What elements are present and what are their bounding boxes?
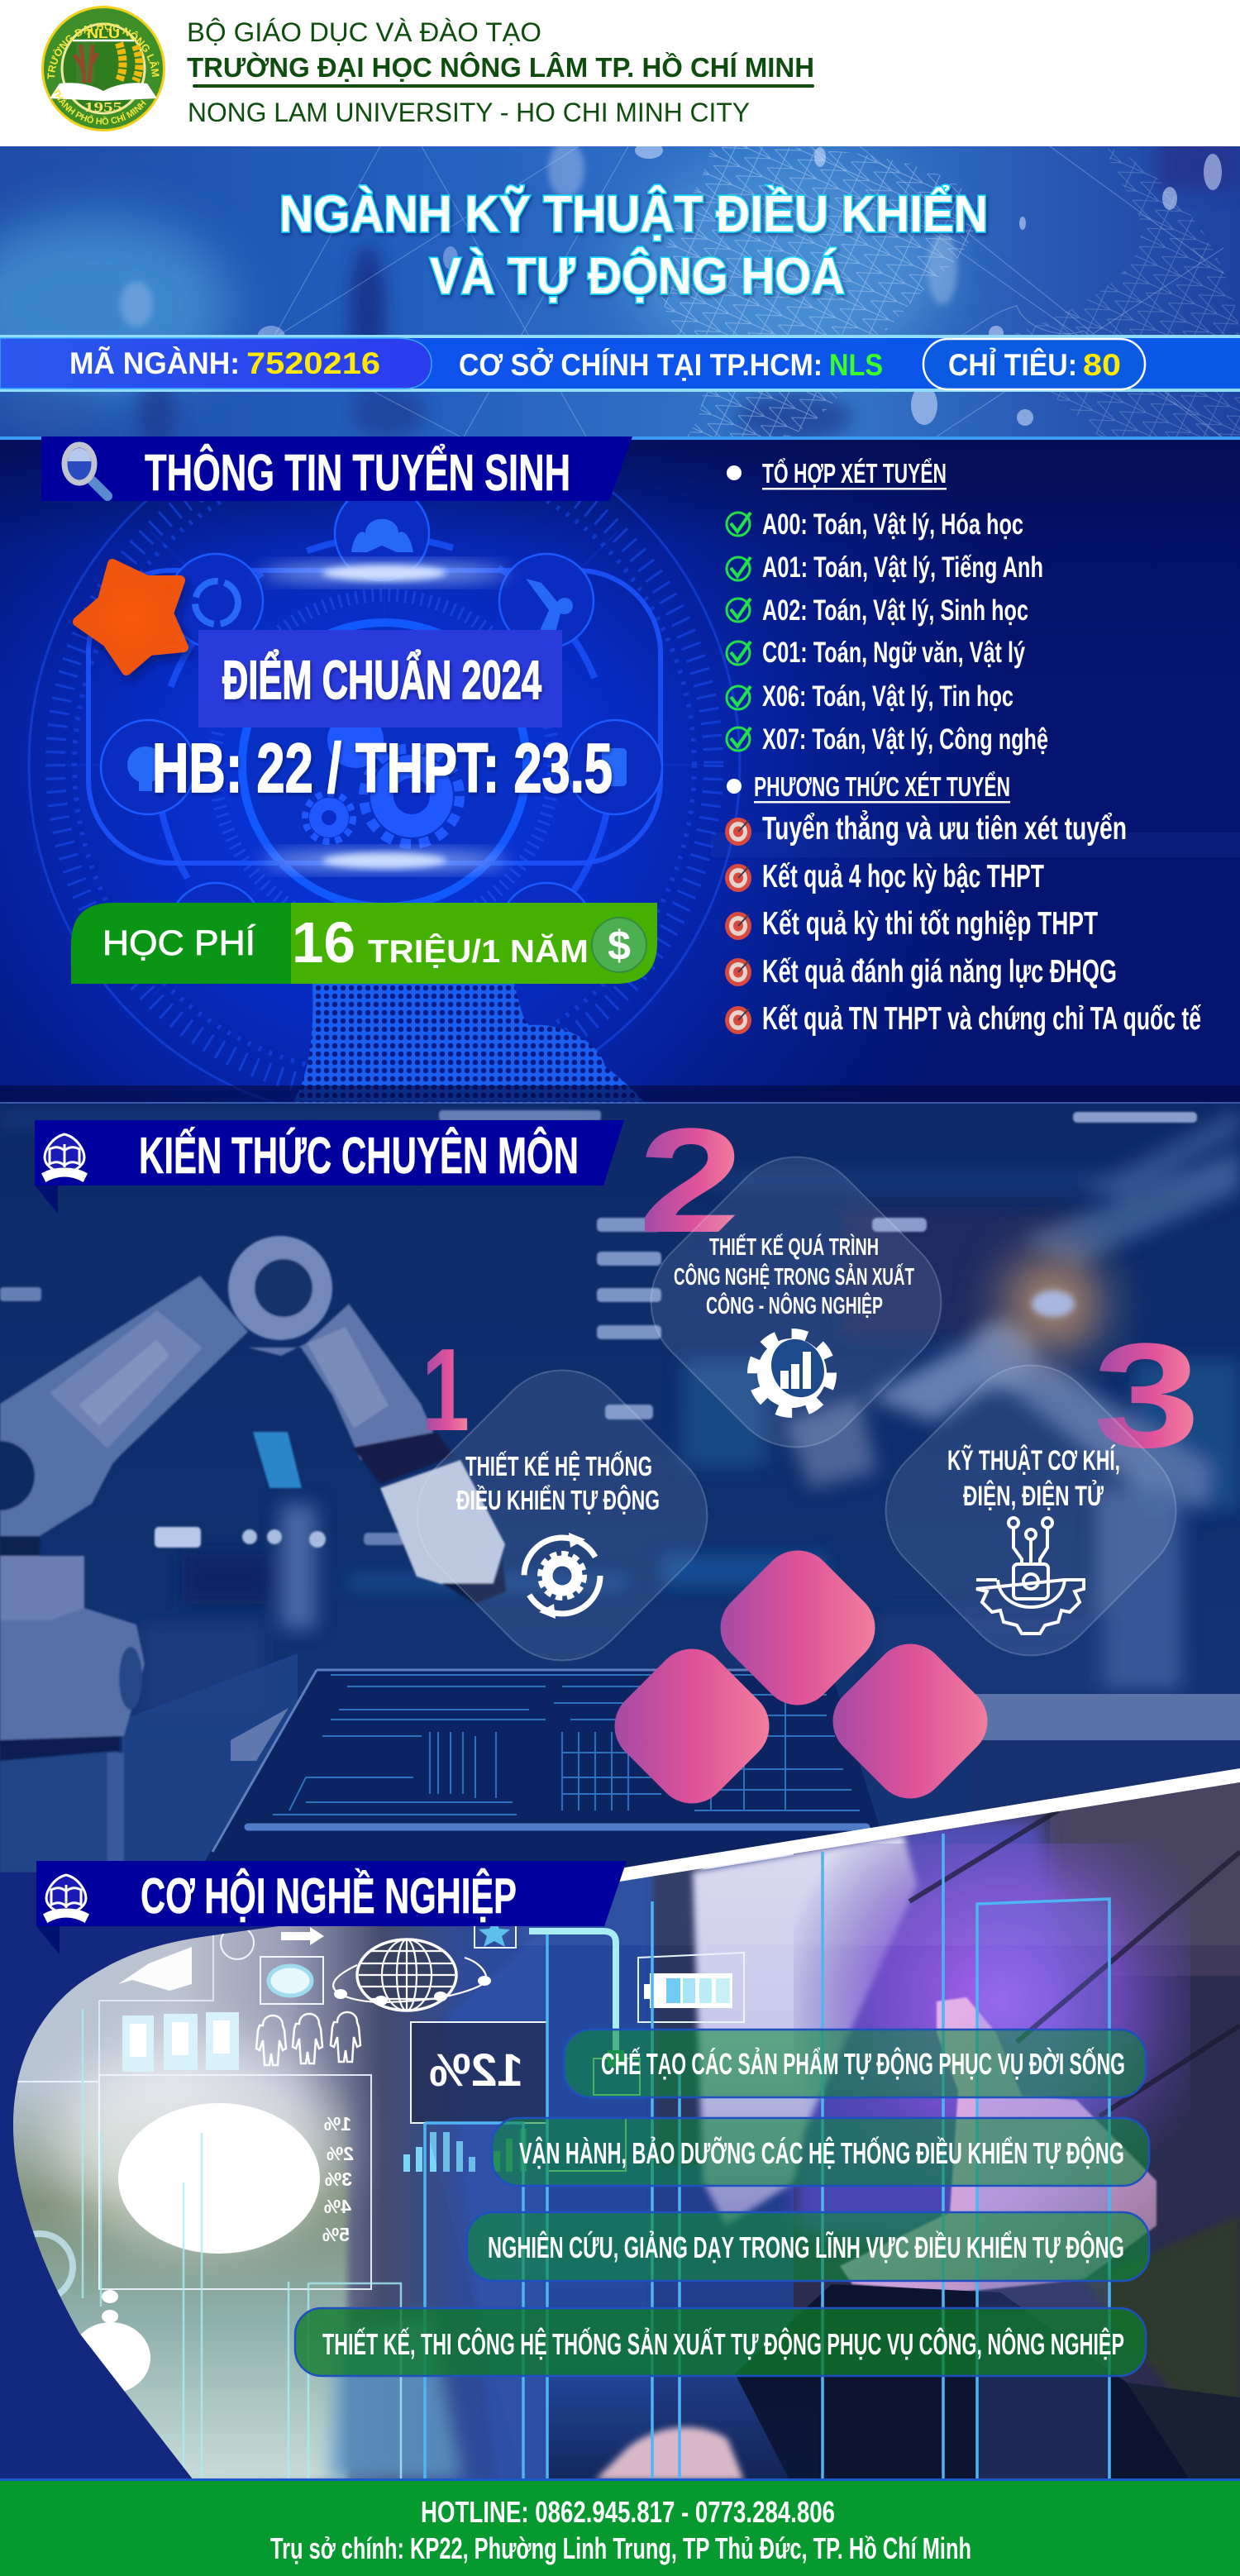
icon: open book crest [45, 1875, 88, 1921]
title [279, 186, 988, 305]
item X06: X06: Toán, Vật lý, Tin học [762, 680, 1013, 713]
bars [403, 2129, 527, 2172]
address: Trụ sở chính: KP22, Phường Linh Trung, TP Thủ Đức, TP. Hồ Chí Minh [270, 2531, 971, 2565]
panel background with tech HUD [0, 409, 1240, 1120]
card: knowledge 2 [622, 1128, 971, 1476]
heading: knowledge: KIẾN THỨC CHUYÊN MÔN [139, 1128, 579, 1185]
method 2: Kết quả 4 học kỳ bậc THPT [762, 859, 1044, 894]
item A02 [727, 594, 1028, 627]
icon: gear cycle [524, 1533, 600, 1619]
header bar [41, 6, 814, 131]
heading: careers [36, 1861, 627, 1954]
icon: globe [333, 1939, 491, 2011]
factory photo background [0, 1104, 1240, 1872]
robot arm [0, 1236, 506, 1872]
university name: TRƯỜNG ĐẠI HỌC NÔNG LÂM TP. HỒ CHÍ MINH [187, 51, 814, 83]
card: knowledge 3: ĐIỆN, ĐIỆN TỬ [963, 1481, 1104, 1512]
card: knowledge 2: CÔNG - NÔNG NGHIỆP [706, 1291, 883, 1319]
major code pill: MÃ NGÀNH: [69, 346, 240, 380]
item C01: C01: Toán, Ngữ văn, Vật lý [762, 637, 1025, 669]
pointing hand [840, 1997, 1157, 2292]
navy backdrop [0, 1777, 1240, 2480]
icon: open book crest [43, 1134, 86, 1181]
icon: star [479, 1920, 510, 1947]
subject combinations list [727, 458, 1048, 756]
panel: admissions info [0, 409, 1240, 1120]
number 1: 1 [422, 1324, 470, 1456]
heading: careers: CƠ HỘI NGHỀ NGHIỆP [141, 1868, 517, 1924]
monitor with circuit traces [198, 1670, 894, 1872]
icon: university logo: TRƯỜNG ĐẠI HỌC NÔNG LÂM [47, 22, 160, 79]
pink diamond left [599, 1634, 785, 1819]
icon: wireframe hand [292, 984, 646, 1104]
career item 3 [467, 2212, 1149, 2281]
heading: knowledge [35, 1120, 624, 1214]
cutoff score box: ĐIỂM CHUẨN 2024 [222, 649, 541, 710]
title: NGÀNH KỸ THUẬT ĐIỀU KHIỂN [279, 186, 988, 243]
card: knowledge 2: THIẾT KẾ QUÁ TRÌNH [709, 1233, 879, 1261]
item A00: A00: Toán, Vật lý, Hóa học [762, 508, 1023, 541]
item X07: X07: Toán, Vật lý, Công nghệ [762, 723, 1048, 756]
campus: CƠ SỞ CHÍNH TẠI TP.HCM: [459, 347, 823, 382]
business photo with HUD [0, 1777, 1240, 2480]
heading: admissions: THÔNG TIN TUYỂN SINH [145, 445, 570, 502]
card: knowledge 3: KỸ THUẬT CƠ KHÍ, [947, 1445, 1120, 1476]
career item 4 [295, 2308, 1146, 2376]
item C01 [727, 637, 1025, 669]
white diagonal slash [579, 1768, 1240, 1888]
career item 1 [564, 2030, 1146, 2097]
admission methods list [725, 771, 1201, 1037]
method 4 [725, 954, 1117, 990]
floor and table [122, 1653, 1240, 1872]
quota pill: CHỈ TIÊU: [948, 347, 1077, 382]
major code pill: 7520216 [246, 346, 380, 380]
panel: professional knowledge [0, 1098, 1240, 1872]
pink diamond right [818, 1629, 1003, 1814]
glow and white shapes [58, 2042, 339, 2240]
mirrored percent labels: 4% [324, 2196, 351, 2217]
number 3: 3 [1093, 1313, 1200, 1479]
icon: orange star [78, 564, 184, 670]
icon: dollar coin: $ [608, 923, 631, 969]
english name: NONG LAM UNIVERSITY - HO CHI MINH CITY [188, 98, 750, 127]
ministry name: BỘ GIÁO DỤC VÀ ĐÀO TẠO [187, 17, 541, 47]
method 3: Kết quả kỳ thi tốt nghiệp THPT [762, 906, 1098, 942]
card: knowledge 1: ĐIỀU KHIỂN TỰ ĐỘNG [456, 1484, 660, 1515]
title: VÀ TỰ ĐỘNG HOÁ [430, 248, 845, 305]
tuition pill [71, 903, 657, 984]
icon: university logo: 1955 [84, 99, 122, 115]
icon: gear with chart [754, 1330, 833, 1411]
mirrored percent labels: 12% [429, 2044, 523, 2096]
card: knowledge 3 [856, 1336, 1205, 1685]
footer [0, 2478, 1240, 2576]
icon: university logo: NLU [87, 27, 120, 41]
mirrored percent labels: 3% [325, 2168, 352, 2190]
heading: admissions [41, 436, 632, 502]
panel: career opportunities [0, 1768, 1240, 2480]
hotline: HOTLINE: 0862.945.817 - 0773.284.806 [421, 2495, 835, 2529]
item A01: A01: Toán, Vật lý, Tiếng Anh [762, 551, 1043, 584]
number 2: 2 [638, 1098, 744, 1264]
tuition pill: HỌC PHÍ [103, 923, 255, 963]
major code pill [0, 338, 432, 389]
tuition pill: 16 [292, 910, 355, 975]
method 1 [725, 809, 1127, 847]
campus: NLS [829, 348, 883, 382]
icon: dollar coin [592, 918, 646, 972]
mirrored percent labels [322, 2044, 523, 2245]
subject combinations list: TỔ HỢP XÉT TUYỂN [762, 458, 947, 489]
quota pill [923, 339, 1145, 389]
quota pill: 80 [1083, 348, 1121, 382]
icon: battery [644, 1973, 732, 2008]
method 2 [725, 859, 1044, 894]
icon: chip with gear [976, 1518, 1084, 1634]
item A01 [727, 551, 1043, 584]
mirrored percent labels: 5% [322, 2224, 350, 2245]
cutoff score values: HB: 22 / THPT: 23.5 [152, 729, 613, 807]
item X06 [727, 680, 1013, 713]
card: knowledge 1 [388, 1341, 737, 1690]
cutoff score box [198, 630, 562, 727]
item X07 [727, 723, 1048, 756]
icon: university logo [41, 6, 165, 131]
mirrored percent labels: 2% [327, 2143, 354, 2164]
HUD graphics [17, 1920, 744, 2289]
hero background: network map [0, 141, 1240, 446]
item A02: A02: Toán, Vật lý, Sinh học [762, 594, 1028, 627]
icon: university logo: THÀNH PHỐ HỒ CHÍ MINH [53, 88, 146, 125]
mirrored percent labels: 1% [324, 2113, 351, 2135]
method 3 [725, 906, 1098, 942]
career item 2 [492, 2118, 1149, 2186]
card: knowledge 2: CÔNG NGHỆ TRONG SẢN XUẤT [674, 1262, 914, 1290]
tuition pill: TRIỆU/1 NĂM [368, 933, 589, 970]
info band [0, 335, 1240, 392]
pink diamond top [705, 1535, 890, 1720]
item A00 [727, 508, 1023, 541]
card: knowledge 1: THIẾT KẾ HỆ THỐNG [465, 1450, 652, 1481]
icon: magnifier [64, 445, 107, 496]
admission methods list: PHƯƠNG THỨC XÉT TUYỂN [754, 771, 1010, 802]
